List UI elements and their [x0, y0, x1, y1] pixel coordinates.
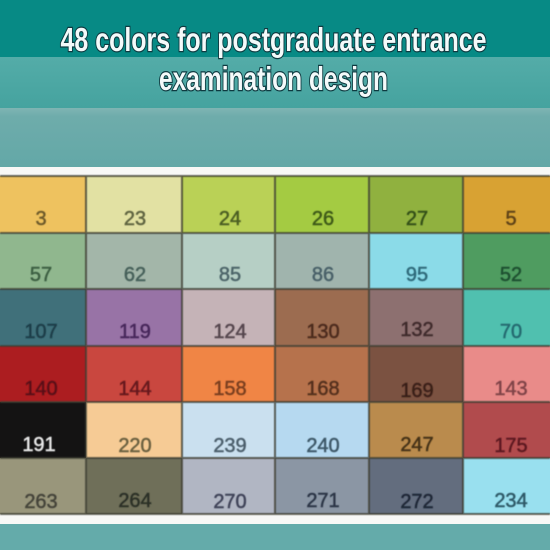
row 1 swatches: 3	[35, 208, 47, 230]
row 3 swatches: 124	[213, 321, 247, 343]
row 2 swatches: 86	[312, 264, 334, 286]
row 1 swatches: 24	[219, 208, 241, 230]
row 5 swatches: 175	[494, 435, 528, 457]
title: examination design	[159, 60, 388, 97]
title	[60, 21, 486, 97]
row 6 swatches: 272	[400, 491, 434, 513]
row 3 swatches: 130	[306, 321, 340, 343]
row 1 swatches	[0, 176, 550, 233]
row 1 swatches: 27	[406, 208, 428, 230]
row 2 swatches: 85	[219, 264, 241, 286]
chart: color swatch grid	[0, 176, 550, 514]
row 6 swatches: 264	[118, 490, 152, 512]
row 1 swatches: 23	[124, 208, 146, 230]
row 4 swatches: 143	[494, 378, 528, 400]
row 1 swatches: 5	[505, 208, 517, 230]
row 3 swatches	[0, 289, 550, 346]
row 6 swatches	[0, 458, 550, 514]
panel: middle teal band	[0, 57, 550, 108]
row 5 swatches	[0, 402, 550, 458]
row 6 swatches: 263	[24, 491, 58, 513]
row 6 swatches: 271	[306, 490, 340, 512]
panel: lower teal band	[0, 108, 550, 167]
row 6 swatches: 270	[213, 491, 247, 513]
row 2 swatches: 57	[30, 264, 52, 286]
panel: top dark teal band	[0, 0, 550, 60]
row 4 swatches: 140	[24, 378, 58, 400]
row 4 swatches: 168	[306, 378, 340, 400]
row 5 swatches: 191	[22, 434, 56, 456]
row 6 swatches: 234	[494, 490, 528, 512]
row 1 swatches: 26	[312, 208, 334, 230]
row 2 swatches: 62	[124, 264, 146, 286]
row 3 swatches: 119	[119, 321, 151, 343]
row 2 swatches	[0, 233, 550, 289]
row 4 swatches: 158	[213, 378, 247, 400]
panel: white color card	[0, 167, 550, 524]
row 4 swatches: 144	[118, 378, 152, 400]
row 2 swatches: 52	[500, 264, 522, 286]
panel: bottom teal band	[0, 523, 550, 550]
row 5 swatches: 240	[306, 435, 340, 457]
row 5 swatches: 247	[400, 434, 434, 456]
row 4 swatches	[0, 346, 550, 402]
row 2 swatches: 95	[406, 264, 428, 286]
row 3 swatches: 70	[500, 321, 522, 343]
row 3 swatches: 132	[400, 319, 434, 341]
row 3 swatches: 107	[24, 321, 58, 343]
row 5 swatches: 239	[213, 435, 247, 457]
row 4 swatches: 169	[400, 380, 434, 402]
row 5 swatches: 220	[118, 435, 152, 457]
